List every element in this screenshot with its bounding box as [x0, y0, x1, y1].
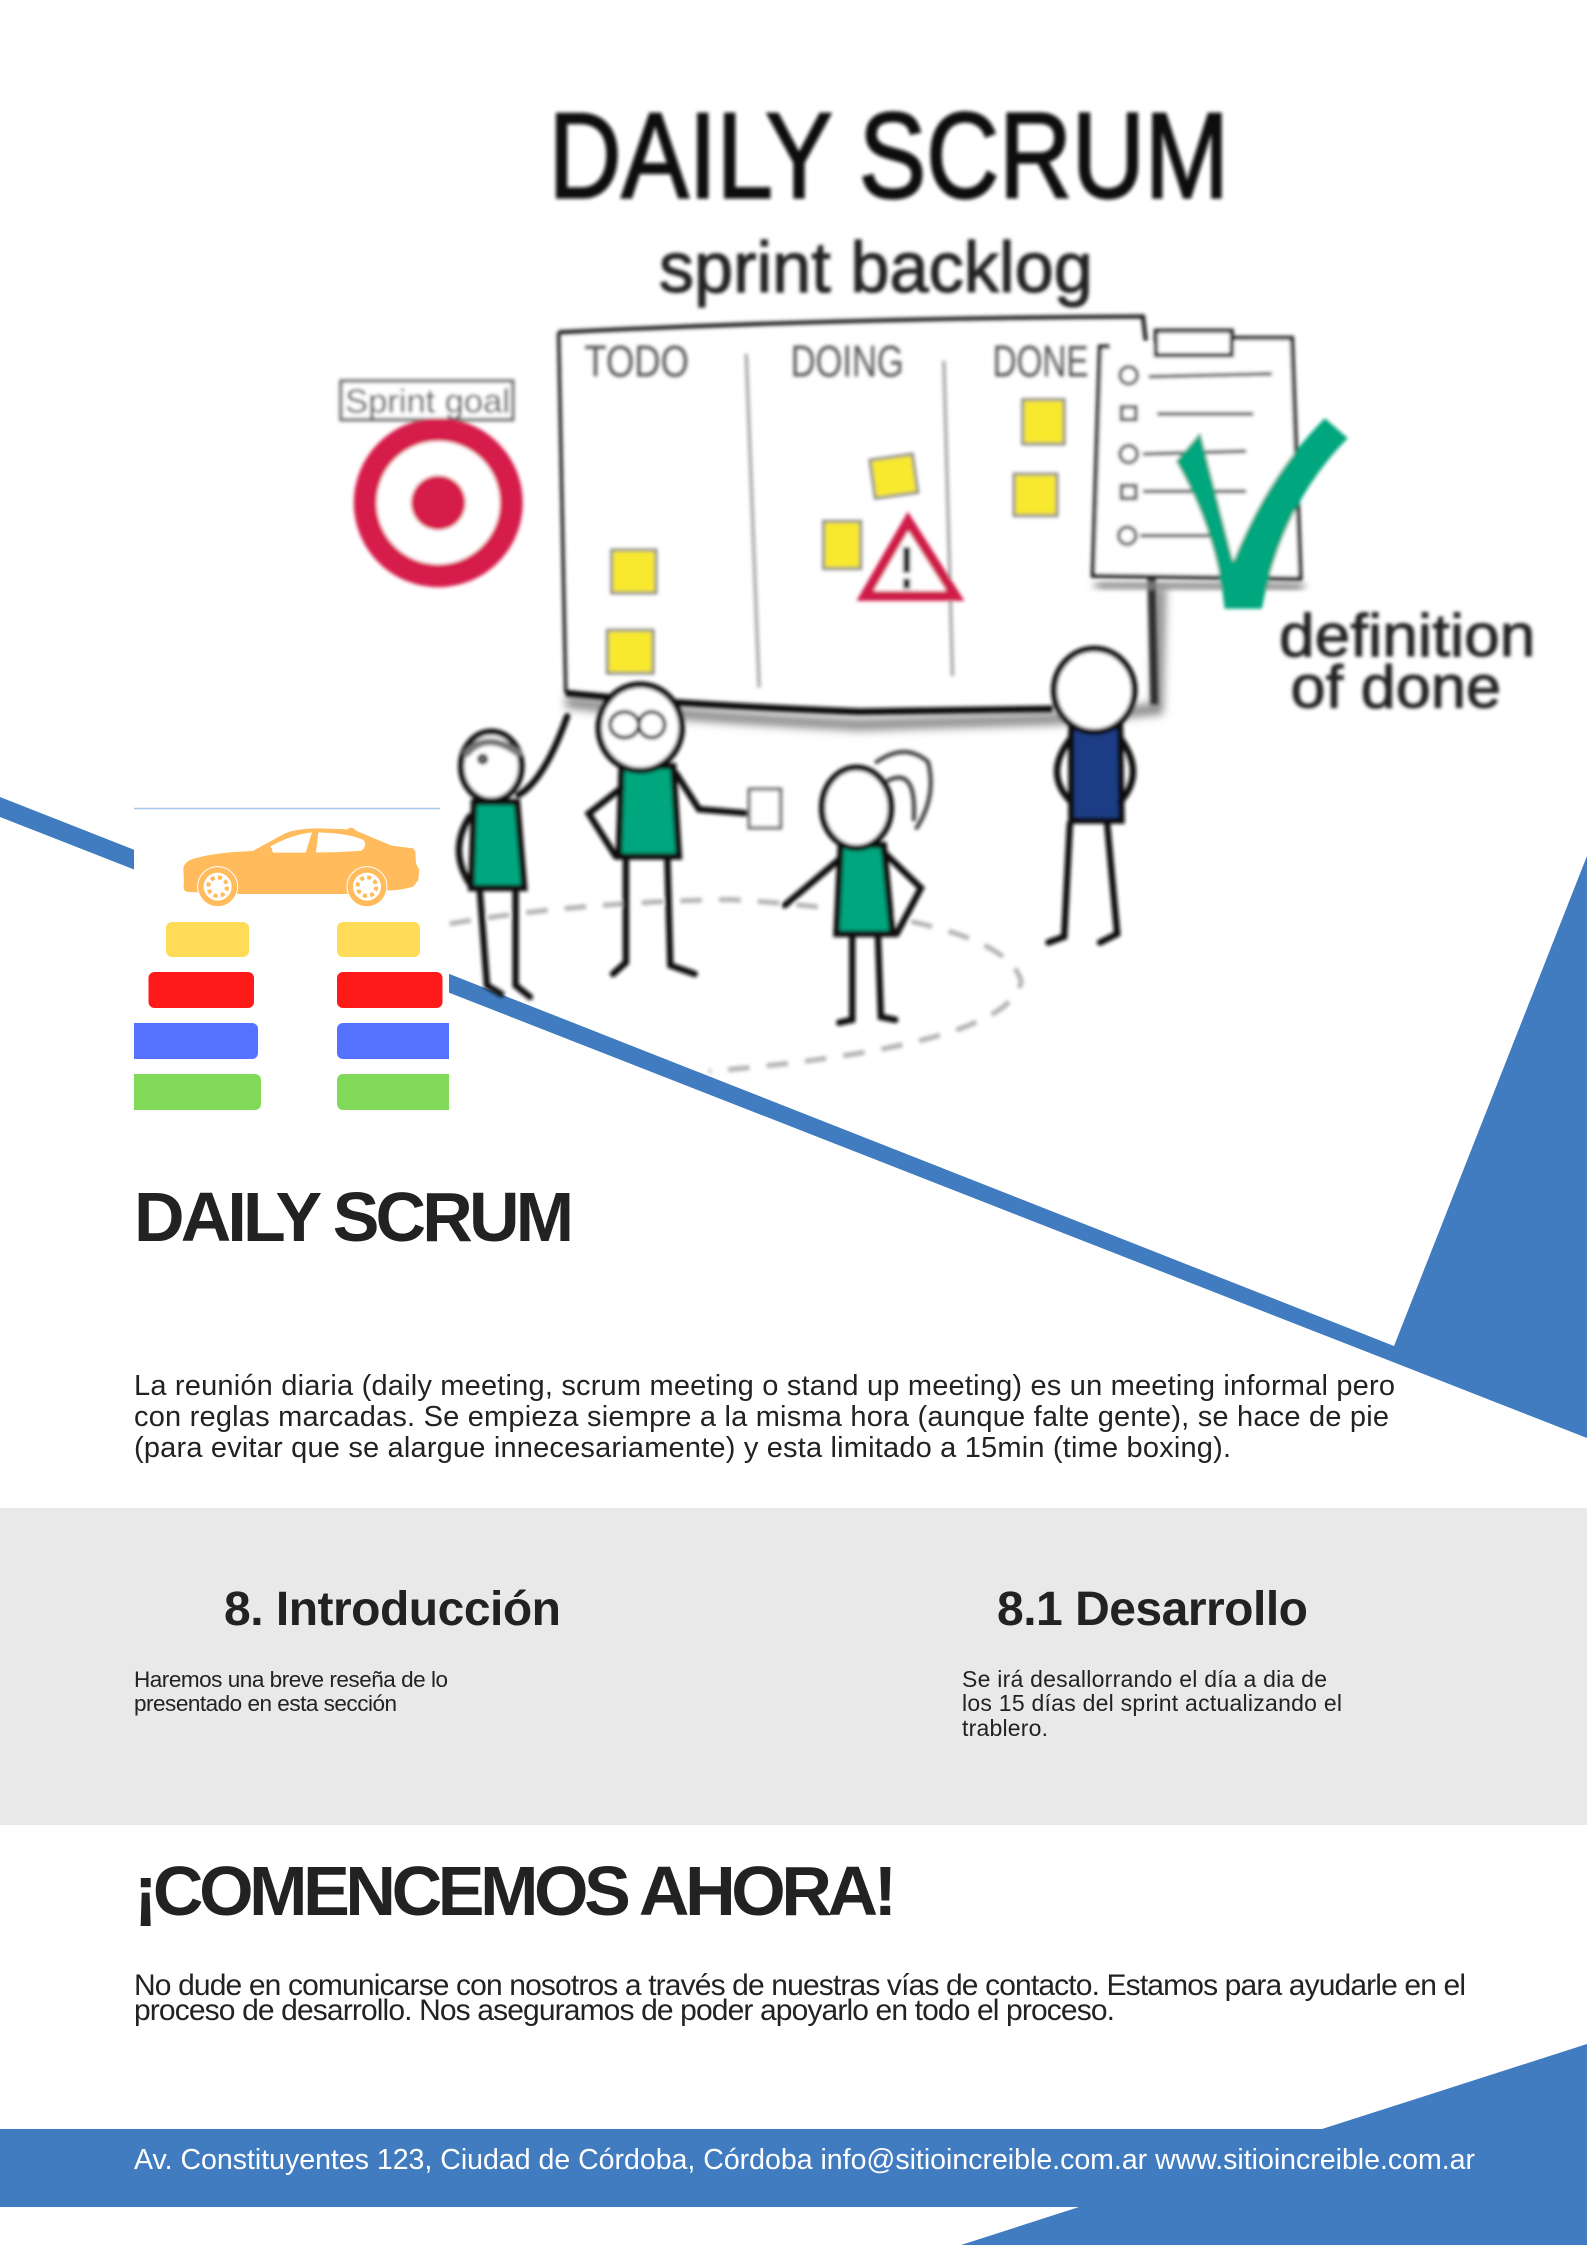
section text 8.1: los 15 días del sprint actualizando el — [962, 1690, 1342, 1716]
definition of done label: of done — [1291, 654, 1501, 721]
section heading 8: 8. Introducción — [224, 1583, 561, 1636]
sticky notes — [607, 400, 1064, 673]
contact paragraph — [134, 1969, 1466, 2027]
clipboard definition of done — [1093, 331, 1303, 587]
road blocks: yellow — [166, 922, 420, 957]
board column labels: TODO — [584, 338, 689, 387]
footer band — [0, 2044, 1587, 2245]
sprint goal label: Sprint goal — [345, 383, 510, 420]
icon: warning triangle — [865, 521, 955, 596]
person 3 girl with ponytail — [785, 752, 931, 1023]
section text 8: presentado en esta sección — [134, 1691, 397, 1716]
icon: green check mark — [1176, 418, 1348, 609]
person 2 with glasses holding paper — [589, 685, 781, 974]
section text 8.1: trablero. — [962, 1715, 1048, 1741]
scrum board — [559, 317, 1160, 725]
section text 8: Haremos una breve reseña de lo — [134, 1667, 448, 1692]
footer contact text: Av. Constituyentes 123, Ciudad de Córdoba, Córdoba info@sitioincreible.com.ar www.sitioincreible.com.ar — [134, 2144, 1476, 2176]
contact paragraph: No dude en comunicarse con nosotros a través de nuestras vías de contacto. Estamos para ayudarle en el — [134, 1969, 1466, 2002]
intro paragraph: (para evitar que se alargue innecesariamente) y esta limitado a 15min (time boxing). — [134, 1432, 1231, 1464]
gray band panel — [0, 1508, 1587, 1825]
person 1 with raised arm — [459, 716, 567, 997]
section text 8 — [134, 1667, 448, 1716]
section heading 8.1: 8.1 Desarrollo — [997, 1583, 1308, 1636]
person 4 in blue — [1048, 649, 1134, 942]
illustration subtitle: sprint backlog — [659, 228, 1093, 308]
road blocks: blue — [134, 1023, 449, 1059]
intro paragraph: con reglas marcadas. Se empieza siempre a la misma hora (aunque falte gente), se hace de pie — [134, 1401, 1389, 1433]
road blocks: green — [134, 1074, 449, 1110]
board column labels — [584, 338, 1089, 387]
call to action heading: ¡COMENCEMOS AHORA! — [134, 1852, 897, 1930]
main heading: DAILY SCRUM — [134, 1178, 574, 1256]
illustration: daily scrum sketch — [341, 88, 1535, 1071]
board column labels: DOING — [791, 338, 904, 387]
illustration title: DAILY SCRUM — [549, 88, 1229, 224]
definition of done label: definition — [1279, 602, 1535, 669]
intro paragraph: La reunión diaria (daily meeting, scrum meeting o stand up meeting) es un meeting informal pero — [134, 1370, 1395, 1402]
definition of done label — [1279, 602, 1535, 721]
intro paragraph — [134, 1370, 1395, 1464]
board column labels: DONE — [993, 338, 1089, 387]
blue diagonal line and triangle — [0, 797, 1587, 1438]
icon: orange car — [183, 828, 419, 907]
icon: target — [365, 430, 511, 576]
section text 8.1 — [962, 1666, 1342, 1741]
dashed circle on floor — [450, 899, 1021, 1071]
road blocks: red — [148, 972, 442, 1008]
car and road image panel — [134, 808, 449, 1120]
section text 8.1: Se irá desallorrando el día a dia de — [962, 1666, 1327, 1692]
contact paragraph: proceso de desarrollo. Nos aseguramos de poder apoyarlo en todo el proceso. — [134, 1994, 1115, 2027]
